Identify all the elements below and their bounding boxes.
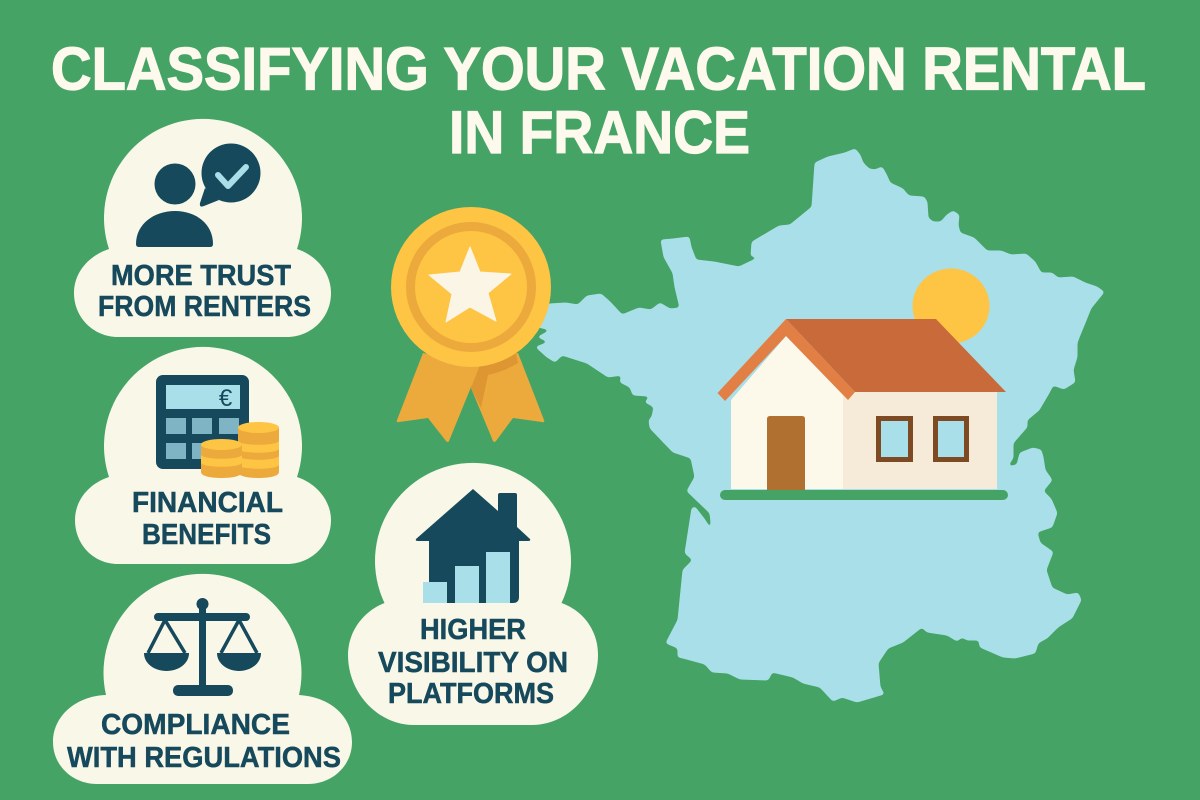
- label: [67, 709, 341, 774]
- ribbon left: [397, 353, 480, 442]
- star: [429, 247, 511, 322]
- coin stack right: [238, 422, 279, 478]
- roof: [786, 319, 1006, 392]
- label: COMPLIANCE: [101, 709, 290, 741]
- icon: calculator and coins: €: [219, 385, 233, 412]
- badge background: [75, 347, 331, 564]
- icon: house with bar chart: [416, 489, 530, 603]
- label: VISIBILITY ON: [378, 647, 568, 679]
- coin stack left: [201, 439, 242, 478]
- roof edge: [718, 319, 855, 401]
- label: PLATFORMS: [388, 678, 554, 710]
- window right: [936, 418, 966, 460]
- badge background: [53, 574, 352, 784]
- ribbon right: [471, 353, 544, 442]
- medal: [391, 207, 551, 442]
- map of France: [530, 149, 1104, 702]
- label: FINANCIAL: [132, 487, 283, 519]
- badge background: [74, 119, 331, 337]
- side wall: [843, 392, 997, 489]
- panel: higher visibility on platforms: [348, 463, 598, 725]
- ground: [720, 490, 1008, 500]
- ribbon shade: [471, 350, 518, 408]
- title: [51, 36, 1146, 166]
- badge background: [348, 463, 598, 725]
- front wall: [731, 336, 844, 489]
- sun: [912, 268, 990, 344]
- label: MORE TRUST: [111, 260, 291, 292]
- title: IN FRANCE: [449, 99, 750, 166]
- medal disc: [391, 207, 551, 367]
- label: WITH REGULATIONS: [67, 742, 341, 774]
- house illustration: [718, 319, 1008, 500]
- label: HIGHER: [420, 614, 526, 646]
- label: [98, 260, 311, 323]
- icon: scales of justice: [144, 598, 261, 696]
- panel: financial benefits: [75, 347, 331, 564]
- panel: compliance with regulations: [53, 574, 352, 784]
- panel: more trust from renters: [74, 119, 331, 337]
- icon: person with speech bubble: [136, 144, 260, 247]
- window left: [878, 418, 910, 460]
- door: [767, 416, 805, 490]
- label: BENEFITS: [142, 519, 271, 551]
- icon: calculator and coins: [156, 375, 279, 478]
- label: [378, 614, 568, 710]
- title: CLASSIFYING YOUR VACATION RENTAL: [51, 36, 1146, 102]
- label: [132, 487, 283, 551]
- medal ring: [410, 226, 532, 348]
- label: FROM RENTERS: [98, 291, 311, 323]
